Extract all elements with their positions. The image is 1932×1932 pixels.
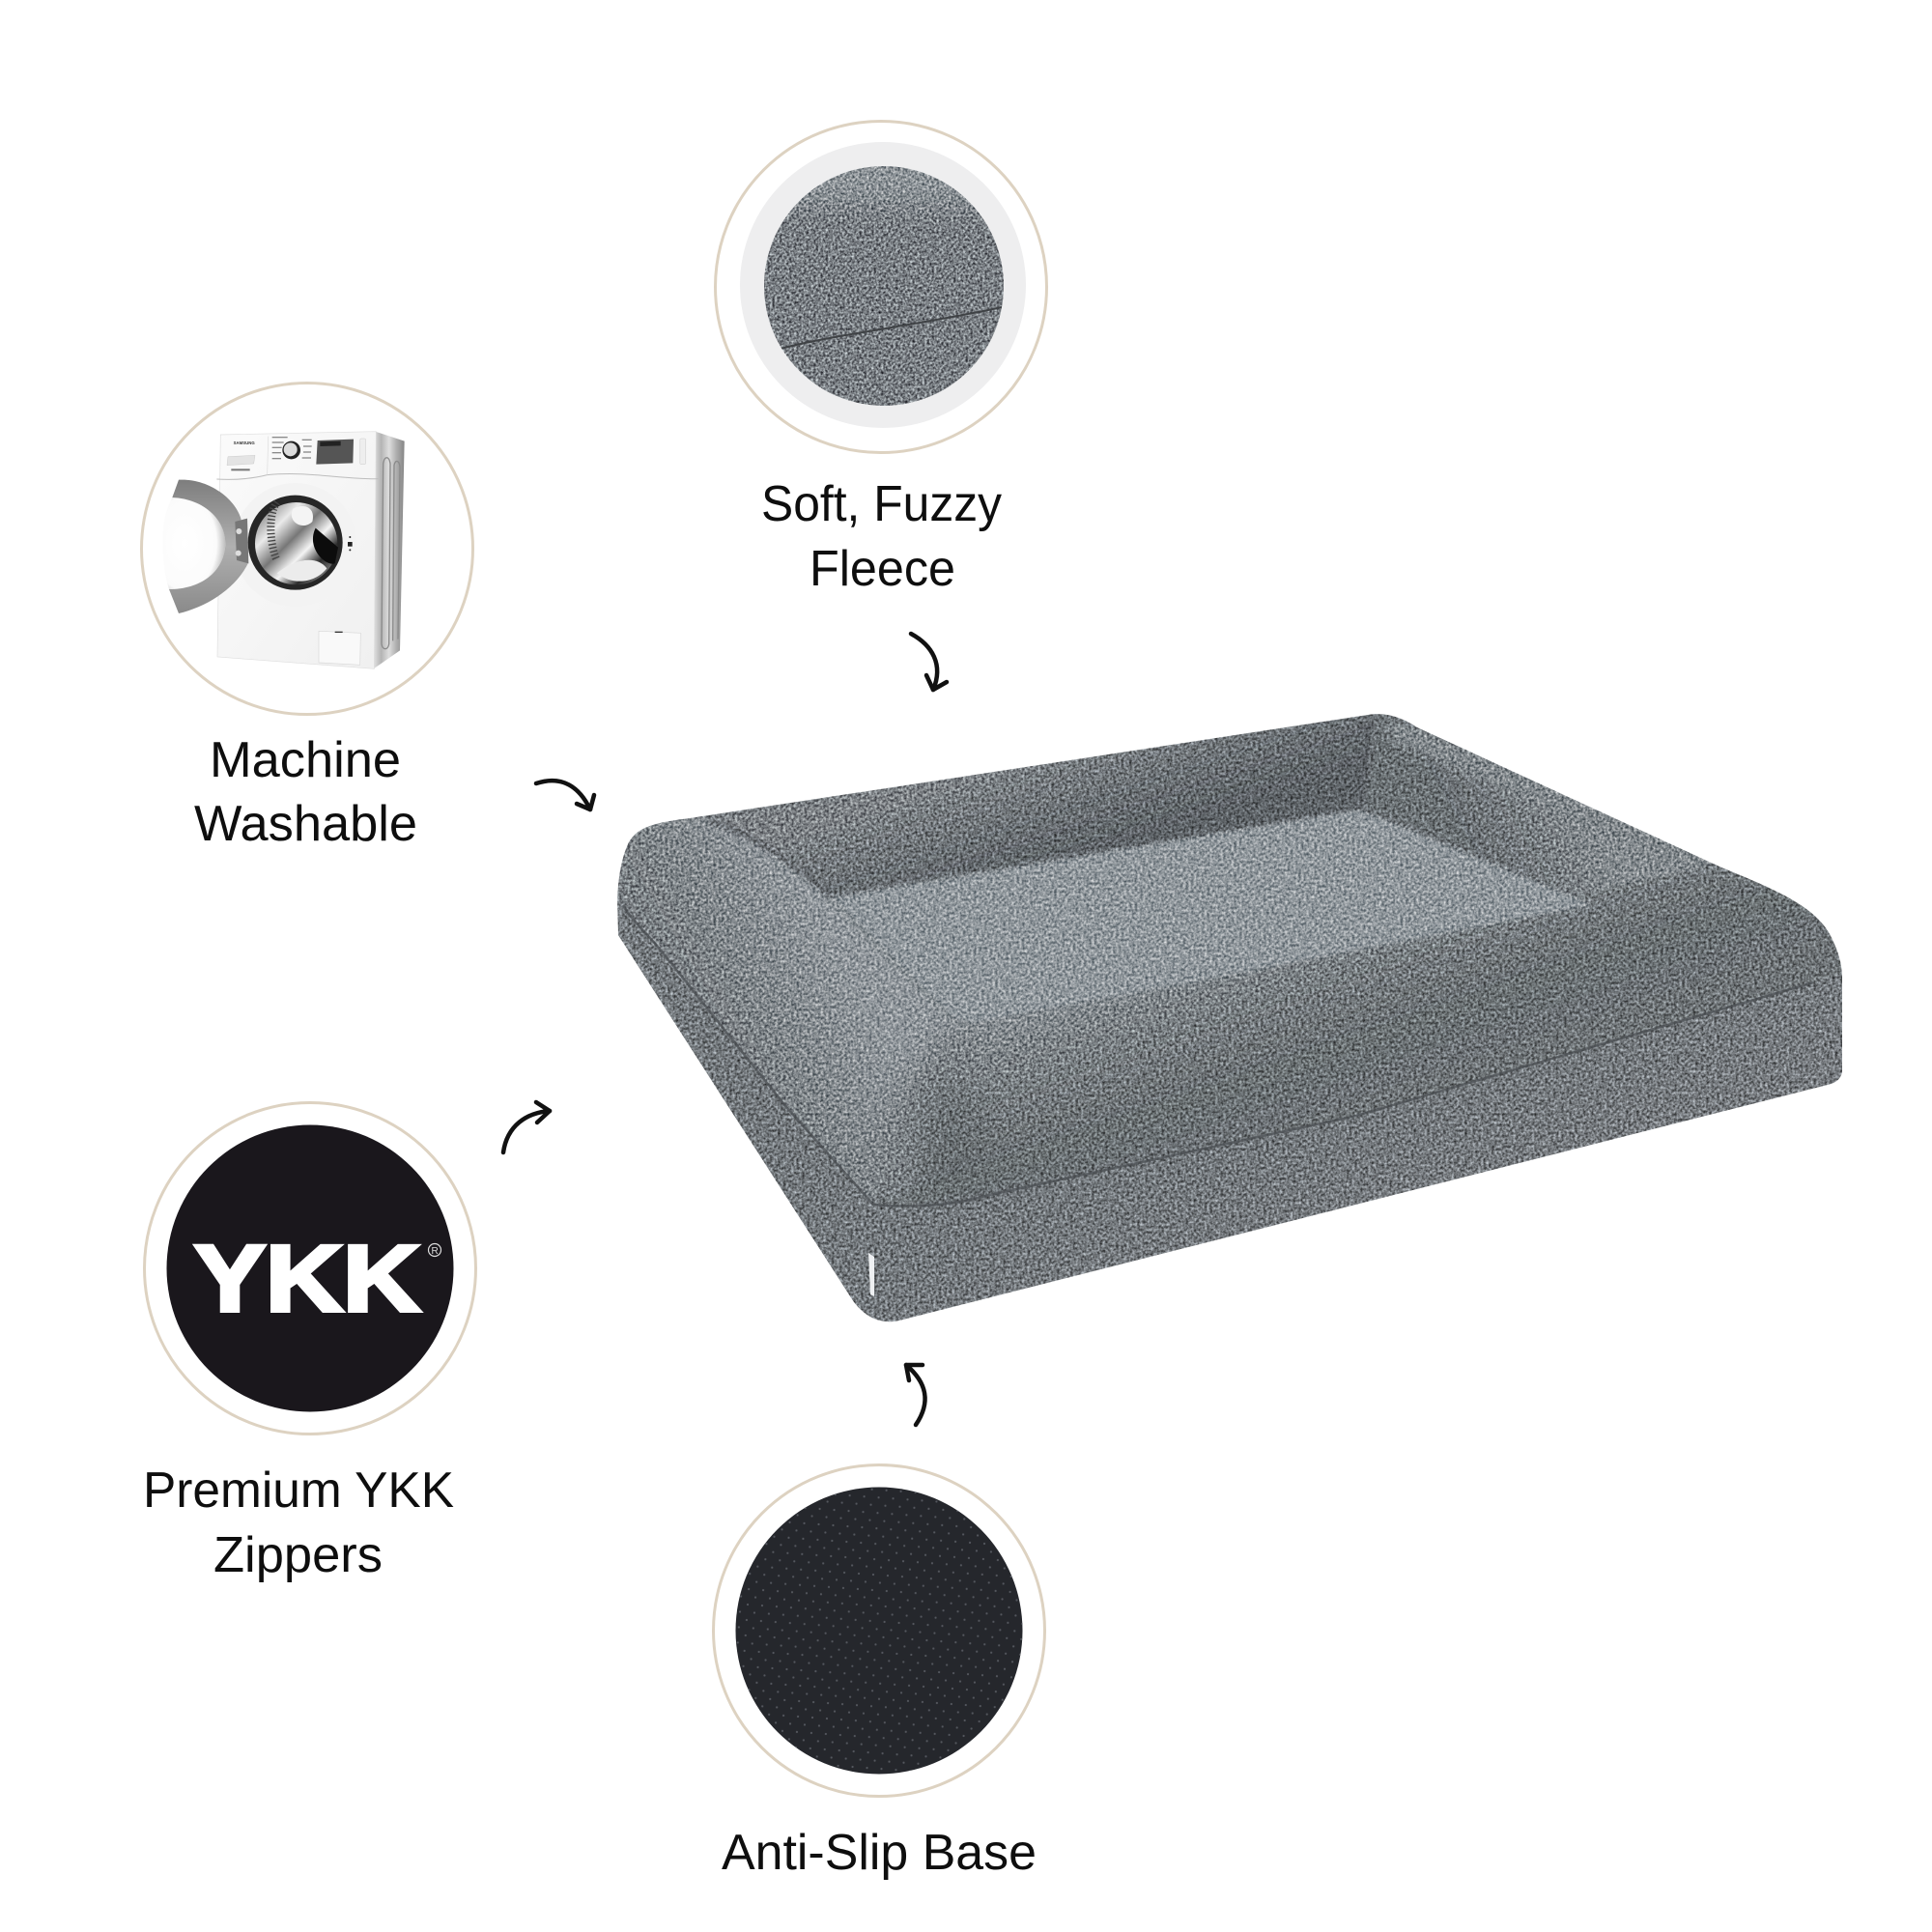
door ring xyxy=(169,480,248,613)
icon: washing machine: SAMSUNG xyxy=(234,440,255,445)
product: grey bolster dog bed xyxy=(617,714,1842,1321)
circle: anti-slip base swatch xyxy=(713,1464,1045,1797)
label: Machine Washable: Washable xyxy=(194,796,417,852)
blend left arm into front bolster xyxy=(881,1038,972,1198)
circle: soft fuzzy fleece swatch xyxy=(715,122,1047,452)
label: Premium YKK Zippers: Zippers xyxy=(213,1527,383,1583)
arrow: machine washable to bed xyxy=(536,781,594,810)
label: Premium YKK Zippers xyxy=(143,1463,454,1583)
arrow: anti-slip base to bed xyxy=(906,1365,925,1425)
label: Machine Washable xyxy=(194,732,417,852)
icon: washing machine xyxy=(163,432,405,668)
label: Machine Washable: Machine xyxy=(210,732,401,788)
bed label tag xyxy=(868,1253,874,1296)
circle: YKK logo: R xyxy=(431,1246,439,1257)
circle: YKK logo xyxy=(145,1103,475,1434)
arrow: fleece to bed xyxy=(911,634,947,690)
door glass xyxy=(163,497,225,589)
circle: YKK logo: YKK xyxy=(194,1226,420,1331)
label: Soft, Fuzzy Fleece: Soft, Fuzzy xyxy=(761,476,1002,532)
label: Soft, Fuzzy Fleece xyxy=(761,476,1002,597)
label: Anti-Slip Base: Anti-Slip Base xyxy=(722,1825,1037,1881)
label: Soft, Fuzzy Fleece: Fleece xyxy=(810,541,955,597)
circle: machine washable xyxy=(141,383,473,715)
arrow: YKK zippers to bed xyxy=(503,1102,550,1152)
label: Premium YKK Zippers: Premium YKK xyxy=(143,1463,454,1519)
